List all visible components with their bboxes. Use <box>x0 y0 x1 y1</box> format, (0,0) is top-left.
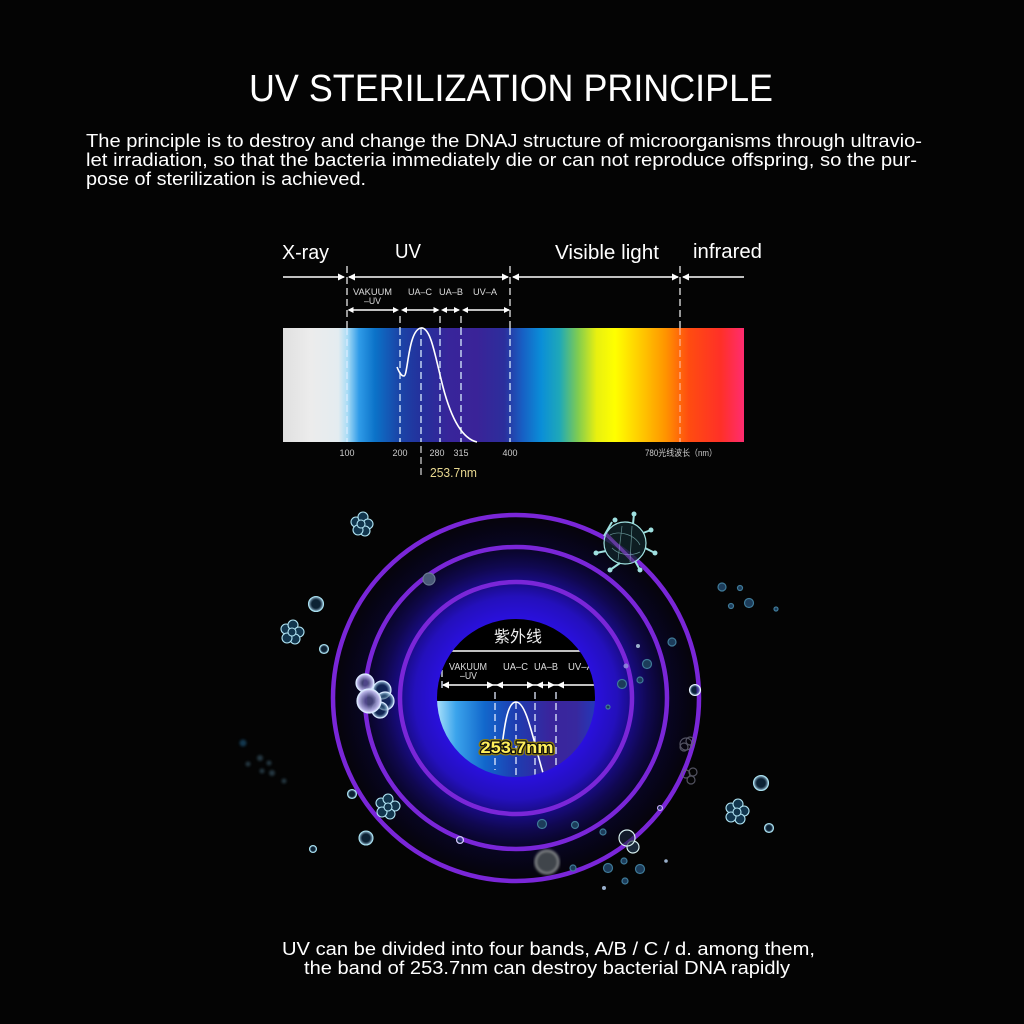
intro paragraph: The principle is to destroy and change the DNAJ structure of microorganisms through ultravio- <box>86 131 922 151</box>
253.7nm label: 253.7nm <box>430 465 477 480</box>
lens band labels: –UV <box>460 671 477 682</box>
lens curve <box>502 702 543 773</box>
lens band labels: UV–A <box>568 662 593 673</box>
spectrum bar <box>283 328 744 442</box>
absorption curve <box>397 328 477 442</box>
wavelength scale labels: 200 <box>392 448 408 458</box>
bottom caption: the band of 253.7nm can destroy bacterial DNA rapidly <box>304 958 790 978</box>
lens: magnified spectrum <box>437 619 595 780</box>
spectrum region headings: X-ray <box>282 242 329 264</box>
lens band labels: VAKUUM <box>449 662 487 673</box>
ring glow <box>332 514 700 882</box>
lens band labels <box>449 663 590 679</box>
intro paragraph: pose of sterilization is achieved. <box>86 169 366 189</box>
UV band labels <box>353 287 497 306</box>
spectrum region headings <box>282 241 762 264</box>
large bacteria cluster <box>356 674 394 718</box>
UV band labels: UV–A <box>473 287 497 297</box>
intro paragraph <box>86 131 922 189</box>
wavelength scale labels <box>339 447 717 458</box>
lens dashed markers <box>442 670 556 780</box>
intro paragraph: let irradiation, so that the bacteria immediately die or can not reproduce offspring, so the pur- <box>86 150 917 170</box>
wavelength scale labels: 280 <box>429 448 445 458</box>
spectrum chart <box>282 241 762 480</box>
spectrum region headings: UV <box>395 241 422 263</box>
wavelength dashed markers <box>347 266 680 478</box>
lens 253.7nm badge: 253.7nm <box>480 738 554 757</box>
lens heading: 紫外线 <box>494 628 542 646</box>
dim bubbles <box>423 573 778 884</box>
small specks <box>602 644 668 890</box>
blurred bubble <box>536 850 558 874</box>
wavelength scale labels: 100 <box>339 448 355 458</box>
bright bubbles <box>308 596 774 852</box>
faint distant particles <box>240 740 286 784</box>
lens 253.7nm badge: 253.7nm <box>480 738 554 757</box>
UV band labels: –UV <box>364 296 381 306</box>
UV band labels: UA–C <box>408 287 432 297</box>
region arrows <box>283 274 744 280</box>
wavelength scale labels: 315 <box>453 448 469 458</box>
UV band arrows <box>348 307 510 313</box>
UV band labels: VAKUUM <box>353 287 392 297</box>
UV band labels: UA–B <box>439 287 463 297</box>
skull-shaped cell <box>619 830 639 853</box>
purple rings <box>333 515 699 881</box>
faded bacteria <box>680 737 697 784</box>
wavelength scale labels: 780光线波长（nm） <box>645 447 717 458</box>
bacteria clusters <box>281 512 749 824</box>
virus <box>594 512 658 572</box>
bottom caption: UV can be divided into four bands, A/B / C / d. among them, <box>282 939 815 959</box>
lens band labels: UA–C <box>503 662 528 673</box>
spectrum region headings: Visible light <box>555 242 659 264</box>
lens 253.7nm badge: 253.7nm <box>480 738 554 757</box>
spectrum region headings: infrared <box>693 241 762 263</box>
lens band labels: UA–B <box>534 662 558 673</box>
lens arrows <box>442 682 594 688</box>
title: UV STERILIZATION PRINCIPLE <box>249 68 773 110</box>
bottom caption <box>282 939 815 978</box>
concentric UV rings diagram <box>240 512 778 890</box>
wavelength scale labels: 400 <box>502 448 518 458</box>
